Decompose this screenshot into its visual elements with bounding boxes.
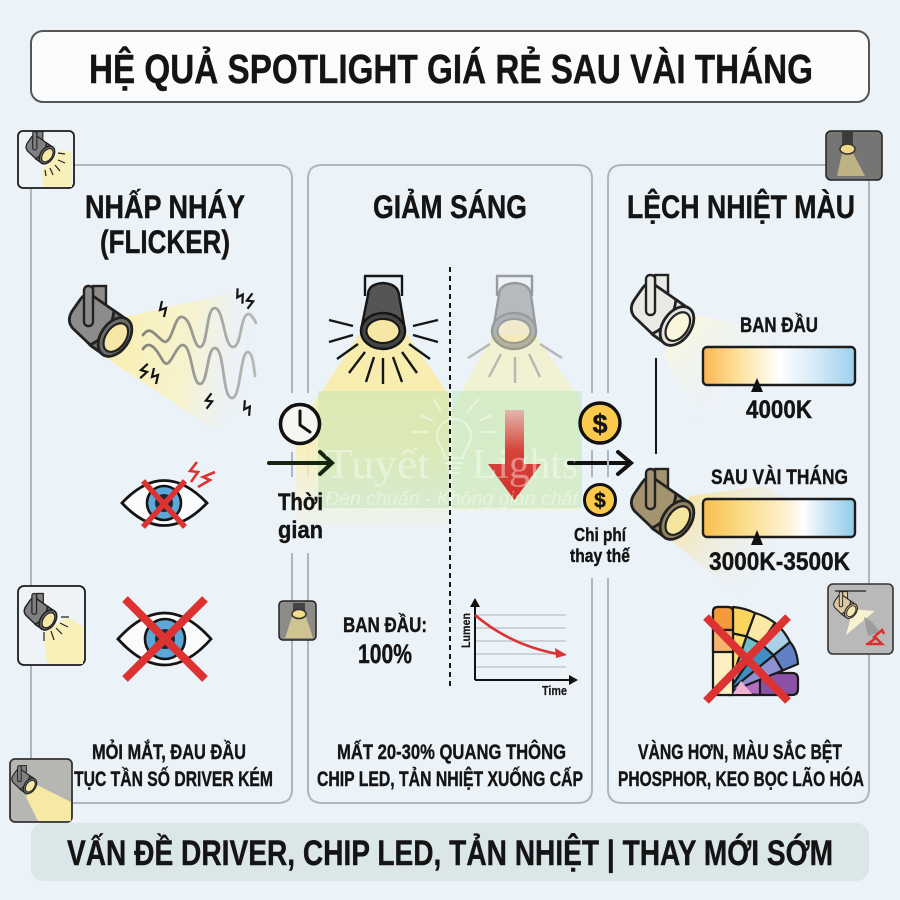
light rays: dimmed	[468, 344, 562, 383]
icon: large dollar coin	[580, 403, 620, 443]
label: initial: BAN ĐẦU	[740, 314, 818, 337]
caption: flicker: TỤC TẦN SỐ DRIVER KÉM	[74, 767, 273, 791]
title	[31, 31, 869, 102]
caption: flicker: MỎI MẮT, ĐAU ĐẦU	[92, 740, 246, 764]
lightning bolts	[137, 288, 256, 416]
icon: large dollar coin: $	[592, 409, 608, 439]
chart: lumen over time	[459, 598, 578, 698]
label: time: gian	[278, 517, 323, 544]
bottom banner	[31, 823, 869, 881]
arrow: time	[269, 452, 332, 474]
label: initial 100%	[343, 614, 427, 669]
thumbnail: top right downlight	[826, 131, 882, 180]
label: after months: SAU VÀI THÁNG	[711, 466, 848, 489]
divider: before and after	[449, 267, 451, 690]
thumbnail: left middle spotlight	[18, 586, 85, 665]
colour bar: after months	[703, 499, 855, 545]
caption: dimming: MẤT 20-30% QUANG THÔNG	[337, 740, 566, 764]
heading: flicker: NHẤP NHÁY	[85, 189, 245, 225]
panel: flicker	[31, 165, 292, 803]
label: time: Thời	[278, 489, 323, 516]
icon: eye with red cross and bolts	[122, 462, 215, 527]
label: initial 100%: 100%	[358, 639, 412, 669]
caption: dimming: CHIP LED, TẢN NHIỆT XUỐNG CẤP	[317, 767, 583, 791]
chart: lumen over time: Time	[542, 683, 567, 698]
value: 3000K-3500K: 3000K-3500K	[709, 548, 850, 576]
icon: dimmed spotlight	[492, 276, 536, 349]
icon: bright spotlight	[361, 276, 405, 349]
light beam: dimmed	[452, 335, 580, 510]
chart: lumen over time: Lumen	[459, 613, 473, 648]
light beam: flicker	[105, 291, 258, 430]
panel: colour shift	[608, 165, 869, 803]
label: replacement cost: thay thế	[570, 546, 631, 566]
heading: dimming: GIẢM SÁNG	[373, 189, 527, 225]
icon: small dollar coin: $	[594, 490, 606, 512]
label: initial 100%: BAN ĐẦU:	[343, 614, 427, 637]
watermark: Tuyết Lights	[325, 399, 579, 510]
watermark background	[318, 391, 582, 508]
icon: tan spotlight	[624, 469, 701, 546]
icon: colour fan with red cross	[706, 607, 798, 701]
label: time	[278, 489, 323, 544]
heading: flicker: (FLICKER)	[100, 224, 230, 260]
arrow: red decline	[488, 410, 541, 500]
value: 4000K: 4000K	[746, 396, 812, 424]
thumbnail: top left spotlight	[18, 131, 74, 188]
flicker waves	[143, 308, 256, 398]
watermark: Tuyết Lights: Đèn chuẩn - Không gian chất	[325, 489, 579, 510]
watermark: Tuyết Lights: Lights	[472, 442, 578, 488]
colour bar: initial	[703, 347, 855, 392]
icon: small dollar coin	[584, 484, 616, 516]
panel: dimming	[269, 165, 631, 803]
light rays: bright	[329, 320, 438, 384]
icon: large eye with red cross	[118, 599, 211, 679]
icon: grey spotlight	[62, 286, 139, 363]
caption: flicker	[74, 740, 273, 791]
arrow: cost	[569, 452, 631, 474]
heading: flicker	[85, 189, 245, 260]
caption: colour shift	[618, 740, 864, 791]
thumbnail: right spotlight with red lamp	[828, 584, 893, 654]
thumbnail: middle downlight	[279, 601, 316, 640]
watermark: Tuyết Lights: Tuyết	[325, 442, 430, 488]
light beam: bright	[296, 330, 449, 525]
light beam: white spotlight	[664, 313, 775, 425]
icon: clock	[280, 404, 320, 444]
label: replacement cost	[570, 525, 631, 566]
icon: white spotlight	[624, 275, 701, 352]
connector line	[655, 358, 657, 454]
heading: colour shift: LỆCH NHIỆT MÀU	[627, 189, 855, 225]
label: replacement cost: Chi phí	[574, 525, 627, 545]
caption: dimming	[317, 740, 583, 791]
light beam: tan spotlight	[668, 486, 790, 600]
thumbnail: bottom left spotlight	[9, 759, 72, 822]
